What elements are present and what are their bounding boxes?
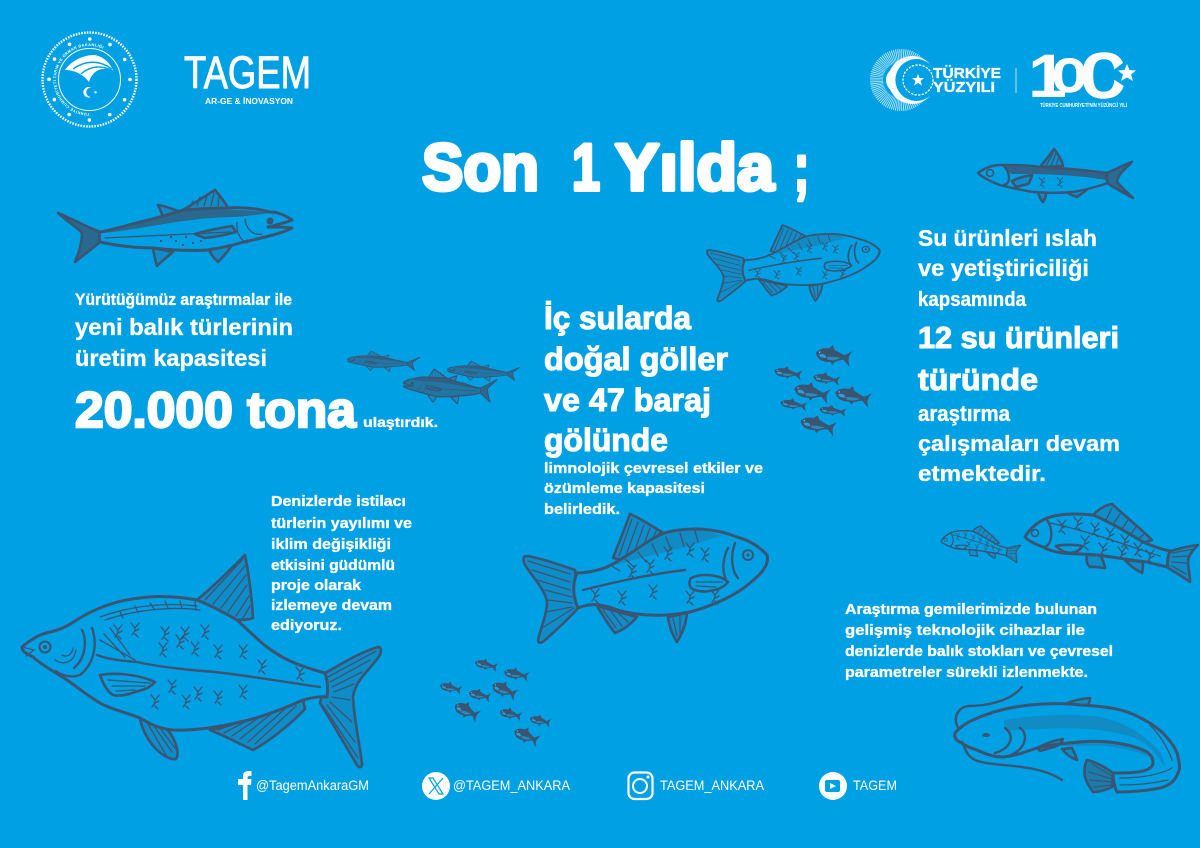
text block: inland waters: özümleme kapasitesi <box>544 480 705 497</box>
fish: small carp right <box>941 526 1021 563</box>
text block: research vessels: gelişmiş teknolojik cihazlar ile <box>845 623 1085 639</box>
divider and logo: 100th anniversary: 0 <box>1081 42 1127 111</box>
title: ; <box>794 130 809 204</box>
fish: large carp right <box>1025 504 1198 582</box>
text block: inland waters: gölünde <box>544 422 668 458</box>
text block: breeding: kapsamında <box>918 289 1027 311</box>
fish: mackerel top left <box>58 190 292 266</box>
text block: breeding: Su ürünleri ıslah <box>918 225 1097 251</box>
text block: production capacity: üretim kapasitesi <box>75 345 267 371</box>
social: Instagram: TAGEM_ANKARA <box>660 778 764 793</box>
social: X <box>422 772 570 800</box>
text block: production capacity: yeni balık türlerinin <box>75 314 293 340</box>
text block: breeding: 12 su ürünleri <box>918 320 1119 355</box>
text block: invasive species: iklim değişikliği <box>271 537 391 553</box>
text block: invasive species <box>271 494 412 634</box>
fish school: small mackerels <box>347 351 520 404</box>
title: Son <box>422 130 539 204</box>
title: Yılda <box>615 130 775 204</box>
text block: inland waters: ve 47 baraj <box>544 382 711 418</box>
text block: inland waters: limnolojik çevresel etkiler ve <box>544 460 763 477</box>
fish school: centre right <box>773 343 873 437</box>
text block: invasive species: türlerin yayılımı ve <box>271 516 412 532</box>
text block: research vessels: parametreler sürekli izlenmekte. <box>845 665 1088 681</box>
fish: large carp centre <box>523 514 768 643</box>
divider and logo: 100th anniversary: 0 <box>1053 51 1086 101</box>
divider and logo: 100th anniversary <box>1016 41 1136 111</box>
text block: invasive species: ediyoruz. <box>271 618 342 634</box>
divider and logo: 100th anniversary: TÜRKİYE CUMHURİYETİ'NİN YÜZÜNCÜ YILI <box>1040 102 1127 109</box>
social: X: @TAGEM_ANKARA <box>453 778 570 793</box>
text block: invasive species: proje olarak <box>271 578 362 594</box>
fish: herring top right <box>978 149 1133 202</box>
text block: invasive species: Denizlerde istilacı <box>271 494 406 510</box>
text block: breeding: türünde <box>918 362 1038 397</box>
text block: production capacity: 20.000 tona <box>75 382 357 438</box>
text block: breeding: etmektedir. <box>918 461 1046 486</box>
text block: research vessels: Araştırma gemilerimizde bulunan <box>845 602 1097 618</box>
divider and logo: 100th anniversary: 1 <box>1028 41 1067 110</box>
text block: breeding <box>918 225 1120 486</box>
text block: breeding: ve yetiştiriciliği <box>918 255 1089 281</box>
social: Facebook: @TagemAnkaraGM <box>256 778 369 793</box>
logo: TAGEM: AR-GE & İNOVASYON <box>205 97 293 106</box>
logo: ministry seal: TÜRKİYE CUMHURİYETİ TARIM VE ORMAN BAKANLIĞI <box>52 43 104 116</box>
social: YouTube <box>819 772 897 800</box>
text block: inland waters: İç sularda <box>544 300 691 336</box>
logo: Türkiye Yüzyılı <box>876 56 1001 104</box>
title <box>422 130 809 204</box>
text block: inland waters: belirledik. <box>544 501 620 518</box>
logo: Türkiye Yüzyılı: YÜZYILI <box>933 79 995 96</box>
fish: large bream <box>22 555 381 767</box>
social: Instagram <box>628 772 764 799</box>
social: YouTube: TAGEM <box>853 778 897 793</box>
text block: breeding: araştırma <box>918 401 1011 426</box>
text block: inland waters <box>544 300 763 518</box>
logo: Türkiye Yüzyılı: TÜRKİYE <box>933 65 1001 82</box>
text block: research vessels <box>845 602 1113 681</box>
text block: invasive species: izlemeye devam <box>271 598 392 614</box>
text block: breeding: çalışmaları devam <box>918 431 1120 456</box>
social: Facebook <box>238 771 369 800</box>
fish: catfish <box>955 687 1180 792</box>
text block: production capacity: ulaştırdık. <box>363 414 438 430</box>
logo: ministry seal <box>41 31 138 128</box>
text block: invasive species: etkisini güdümlü <box>271 558 395 574</box>
text block: production capacity: Yürütüğümüz araştırmalar ile <box>75 291 292 309</box>
title: 1 <box>572 130 600 204</box>
fish school: bottom centre <box>439 657 552 748</box>
text block: research vessels: denizlerde balık stokları ve çevresel <box>845 644 1113 660</box>
logo: TAGEM: TAGEM <box>184 47 311 98</box>
text block: inland waters: doğal göller <box>544 341 728 377</box>
fish: carp top centre <box>707 225 880 301</box>
text block: production capacity <box>75 291 438 438</box>
